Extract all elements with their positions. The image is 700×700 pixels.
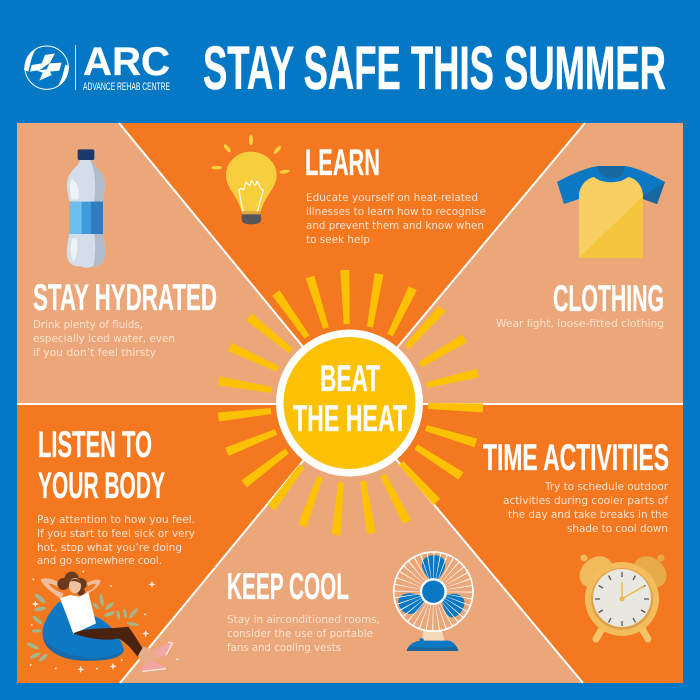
text: listen description: hot, stop what you’re doing (37, 542, 182, 554)
sun circle with beat the heat: THE HEAT (293, 398, 407, 439)
text: learn description (306, 192, 486, 246)
logo: ARC Advance Rehab Centre (24, 40, 170, 93)
text: stay hydrated description: Drink plenty of fluids, (33, 319, 143, 331)
text: time activities description: the day and take breaks in the (508, 509, 668, 521)
text: keep cool description (227, 614, 380, 654)
heading: listen to your body: YOUR BODY (38, 465, 165, 506)
heading: listen to your body (38, 424, 165, 506)
text: time activities description (503, 481, 669, 535)
panel: time activities (483, 437, 673, 639)
text: listen description: If you start to feel sick or very (37, 528, 195, 540)
panel: clothing (496, 166, 665, 330)
panel: keep cool (227, 552, 473, 654)
icon: electric fan (394, 552, 473, 651)
text: learn description: Educate yourself on heat-related (306, 192, 478, 204)
text: learn description: illnesses to learn how to recognise (306, 206, 486, 218)
text: listen description: and go somewhere cool. (37, 555, 162, 567)
icon: alarm clock (573, 550, 673, 639)
text: stay hydrated description: if you don’t feel thirsty (33, 347, 156, 359)
text: stay hydrated description (33, 319, 175, 359)
icon: water bottle (67, 149, 105, 268)
text: time activities description: activities during cooler parts of (503, 495, 668, 507)
text: stay hydrated description: especially iced water, even (33, 333, 175, 345)
text: listen description (37, 514, 195, 567)
text: clothing description: Wear light, loose-fitted clothing (496, 318, 664, 330)
heading: stay hydrated: STAY HYDRATED (33, 277, 217, 318)
text: keep cool description: fans and cooling vests (227, 642, 341, 654)
icon: woman relaxing on beanbag (26, 571, 178, 673)
heading: keep cool: KEEP COOL (227, 566, 349, 607)
text: listen description: Pay attention to how you feel. (37, 514, 195, 526)
sun circle with beat the heat (276, 330, 423, 476)
text: learn description: and prevent them and know when (306, 220, 484, 232)
heading: learn: LEARN (305, 142, 380, 183)
icon: t-shirt (557, 166, 665, 258)
text: time activities description: Try to schedule outdoor (544, 481, 669, 493)
panel: learn (211, 135, 486, 246)
heading: listen to your body: LISTEN TO (38, 424, 152, 465)
panel: stay hydrated (33, 149, 217, 359)
sun circle with beat the heat: BEAT (320, 358, 380, 399)
text: time activities description: shade to cool down (567, 523, 668, 535)
logo: ARC Advance Rehab Centre: ADVANCE REHAB CENTRE (83, 81, 170, 93)
panel background (17, 123, 683, 683)
text: keep cool description: Stay in airconditioned rooms, (227, 614, 380, 626)
logo: ARC Advance Rehab Centre: ARC (83, 40, 170, 84)
sun rays (218, 270, 483, 535)
text: keep cool description: consider the use of portable (227, 628, 373, 640)
icon: light bulb (211, 135, 290, 224)
text: learn description: to seek help (306, 234, 370, 246)
panel: listen to your body (26, 424, 195, 673)
